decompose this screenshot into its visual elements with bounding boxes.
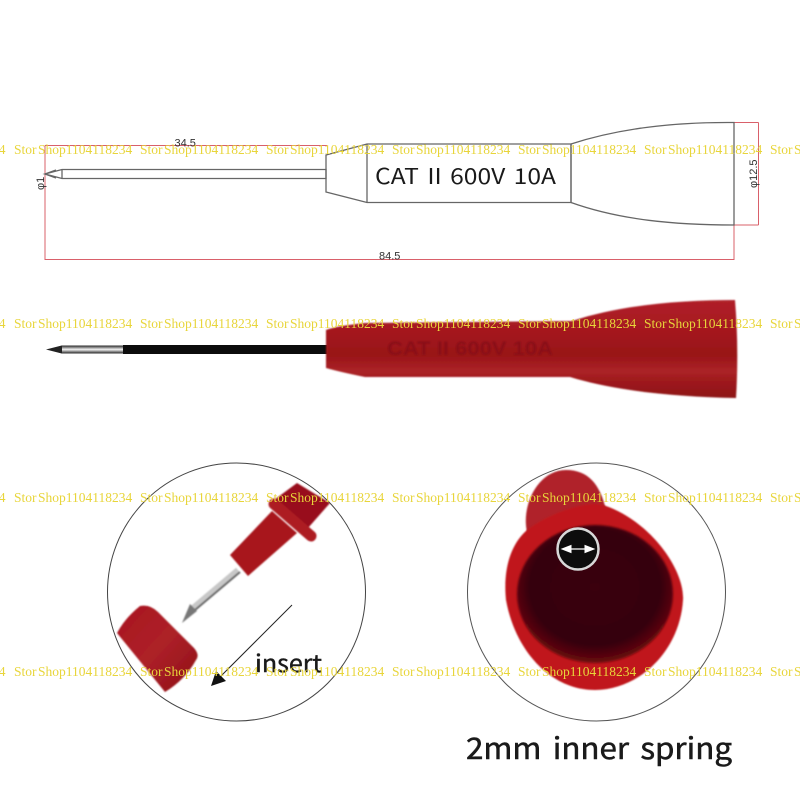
dimension diameter 12.5: φ12.5 (748, 159, 760, 188)
plug flange (274, 504, 311, 536)
watermark rows: Stor (770, 664, 793, 679)
red handle (326, 300, 737, 398)
watermark rows: Shop1104118234 (416, 316, 511, 331)
watermark rows: Shop1104118234 (290, 142, 385, 157)
technical drawing: probe outline with dimensions (35, 122, 760, 263)
watermark rows: Shop1104118234 (164, 316, 259, 331)
black needle shaft (123, 345, 327, 354)
probe plug and cap (117, 483, 330, 692)
watermark rows: Shop1104118234 (542, 490, 637, 505)
watermark rows: Stor (266, 142, 289, 157)
watermark rows: Stor (770, 490, 793, 505)
plug body (230, 511, 297, 576)
circle outline (108, 463, 366, 721)
width arrow (562, 546, 594, 552)
watermark rows: Stor (518, 316, 541, 331)
watermark rows: Stor (392, 490, 415, 505)
watermark rows: Stor (140, 316, 163, 331)
plug needle (193, 570, 238, 608)
watermark rows: Stor (392, 142, 415, 157)
watermark rows: Shop1104118234 (164, 664, 259, 679)
watermark rows: Shop1104118234 (38, 142, 133, 157)
circle outline (468, 463, 726, 721)
embossed handle text: CAT II 600V 10A (387, 339, 553, 360)
watermark rows: Shop1104118234 (416, 664, 511, 679)
watermark rows: Stor (392, 316, 415, 331)
watermark rows: Shop1104118234 (668, 316, 763, 331)
watermark rows: Stor (266, 664, 289, 679)
watermark rows: Stor (140, 664, 163, 679)
dimension lines (45, 122, 758, 260)
watermark rows: Stor (140, 142, 163, 157)
probe top knob (526, 470, 606, 540)
watermark rows: Shop1104118234 (290, 316, 385, 331)
watermark rows: Stor (644, 664, 667, 679)
watermark rows: Stor (14, 142, 37, 157)
dimension 84.5: 84.5 (379, 250, 400, 262)
watermark rows: Stor (770, 316, 793, 331)
watermark rows: Shop1104118234 (416, 142, 511, 157)
red probe photo (46, 300, 737, 398)
plug head (274, 483, 330, 528)
watermark rows: Shop1104118234 (668, 142, 763, 157)
watermark rows: Stor (644, 316, 667, 331)
dimension diameter 1: φ1 (35, 177, 47, 190)
insert label: insert (255, 644, 322, 679)
watermark rows: Shop1104118234 (668, 664, 763, 679)
circle: inner spring detail (468, 463, 726, 721)
watermark rows: Shop1104118234 (542, 316, 637, 331)
spring socket (558, 528, 598, 570)
watermark rows: Shop1104118234 (38, 490, 133, 505)
needle tip (46, 346, 124, 354)
watermark rows: Shop1104118234 (290, 664, 385, 679)
rating label: CAT II 600V 10A (375, 160, 556, 191)
watermark rows: Shop1104118234 (290, 490, 385, 505)
watermark rows: Stor (392, 664, 415, 679)
watermark rows: Stor (266, 316, 289, 331)
watermark rows: Stor (14, 316, 37, 331)
watermark rows (0, 142, 800, 679)
watermark rows: Shop1104118234 (38, 664, 133, 679)
insert arrow (211, 605, 292, 686)
dimension 34.5: 34.5 (174, 138, 196, 150)
cap (117, 606, 198, 692)
watermark rows: Shop1104118234 (542, 664, 637, 679)
probe outline (45, 122, 734, 225)
watermark rows: Stor (518, 664, 541, 679)
watermark rows: Stor (14, 490, 37, 505)
watermark rows: Shop1104118234 (668, 490, 763, 505)
watermark rows: Stor (14, 664, 37, 679)
circle: insert detail (108, 463, 366, 721)
watermark rows: Shop1104118234 (542, 142, 637, 157)
watermark rows: Shop1104118234 (164, 490, 259, 505)
watermark rows: Stor (770, 142, 793, 157)
spring caption: 2mm inner spring (466, 726, 732, 768)
watermark rows: Shop1104118234 (416, 490, 511, 505)
watermark rows: Shop1104118234 (164, 142, 259, 157)
watermark rows: Stor (644, 490, 667, 505)
flared cup rim (505, 504, 683, 690)
watermark rows: Stor (140, 490, 163, 505)
watermark rows: Stor (518, 490, 541, 505)
watermark rows: Stor (266, 490, 289, 505)
cup interior (517, 525, 673, 663)
watermark rows: Shop1104118234 (38, 316, 133, 331)
watermark rows: Stor (644, 142, 667, 157)
watermark rows: Stor (518, 142, 541, 157)
